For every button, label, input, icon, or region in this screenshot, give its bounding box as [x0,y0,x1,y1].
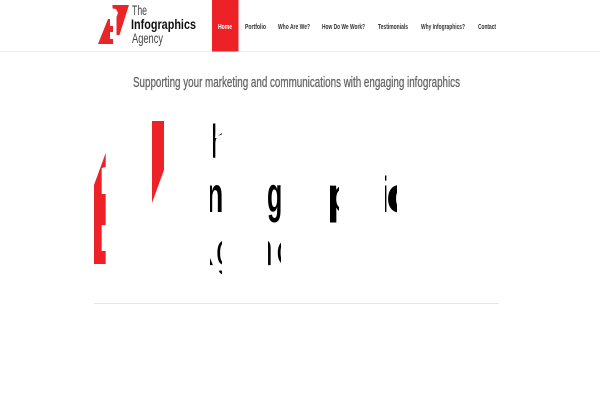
page canvas [0,0,600,304]
header bar [0,0,600,52]
navigation menu: Who Are We? [278,22,310,31]
large wordmark line two: Infographics: g [267,168,282,223]
navigation menu: Testimonials [378,22,408,31]
large wordmark line two: Infographics [210,176,397,222]
divider rule [94,303,499,304]
nav: active home tab: Home [218,22,232,31]
header logo wordmark: Infographics [131,16,196,32]
icon: large logo left red slice [94,153,106,264]
large wordmark line two: Infographics: n [206,166,223,223]
large wordmark line two: Infographics: c [386,167,414,223]
header logo wordmark: Agency [132,30,163,46]
navigation menu: Portfolio [245,22,266,31]
large wordmark line three: Agency: Ag [181,221,242,277]
large wordmark line one: The: The [181,114,264,170]
header logo wordmark [131,2,196,46]
large wordmark line three: Agency: nc [247,221,300,277]
large wordmark line two: Infographics: i [381,167,395,223]
large wordmark line two: Infographics: p [326,167,357,223]
large wordmark line three: Agency [210,241,281,274]
navigation menu: Why Infographics? [421,22,465,31]
nav: active home tab [212,0,238,52]
icon: header logo mark [98,5,129,44]
navigation menu: How Do We Work? [322,22,365,31]
icon: large logo right red slice [152,121,164,203]
header logo wordmark: The [132,2,147,18]
navigation menu [212,0,496,52]
navigation menu: Contact [478,22,496,31]
